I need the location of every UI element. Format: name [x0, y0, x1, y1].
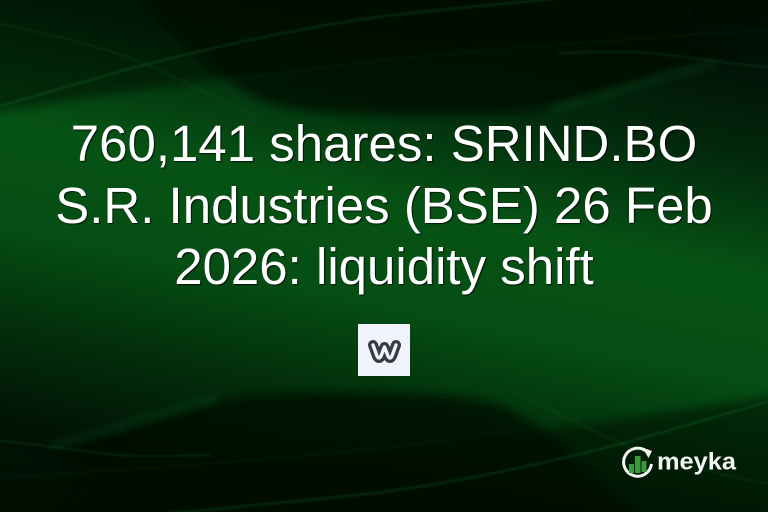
logo mark: [624, 448, 652, 476]
wordmark: meyka: [657, 448, 737, 476]
title: 2026: liquidity shift: [174, 238, 594, 295]
title: S.R. Industries (BSE) 26 Feb: [55, 176, 713, 234]
icon: Weebly tile: [358, 324, 410, 376]
logo: meyka: [622, 446, 737, 478]
title: 760,141 shares: SRIND.BO: [71, 115, 697, 172]
title: [55, 115, 713, 296]
